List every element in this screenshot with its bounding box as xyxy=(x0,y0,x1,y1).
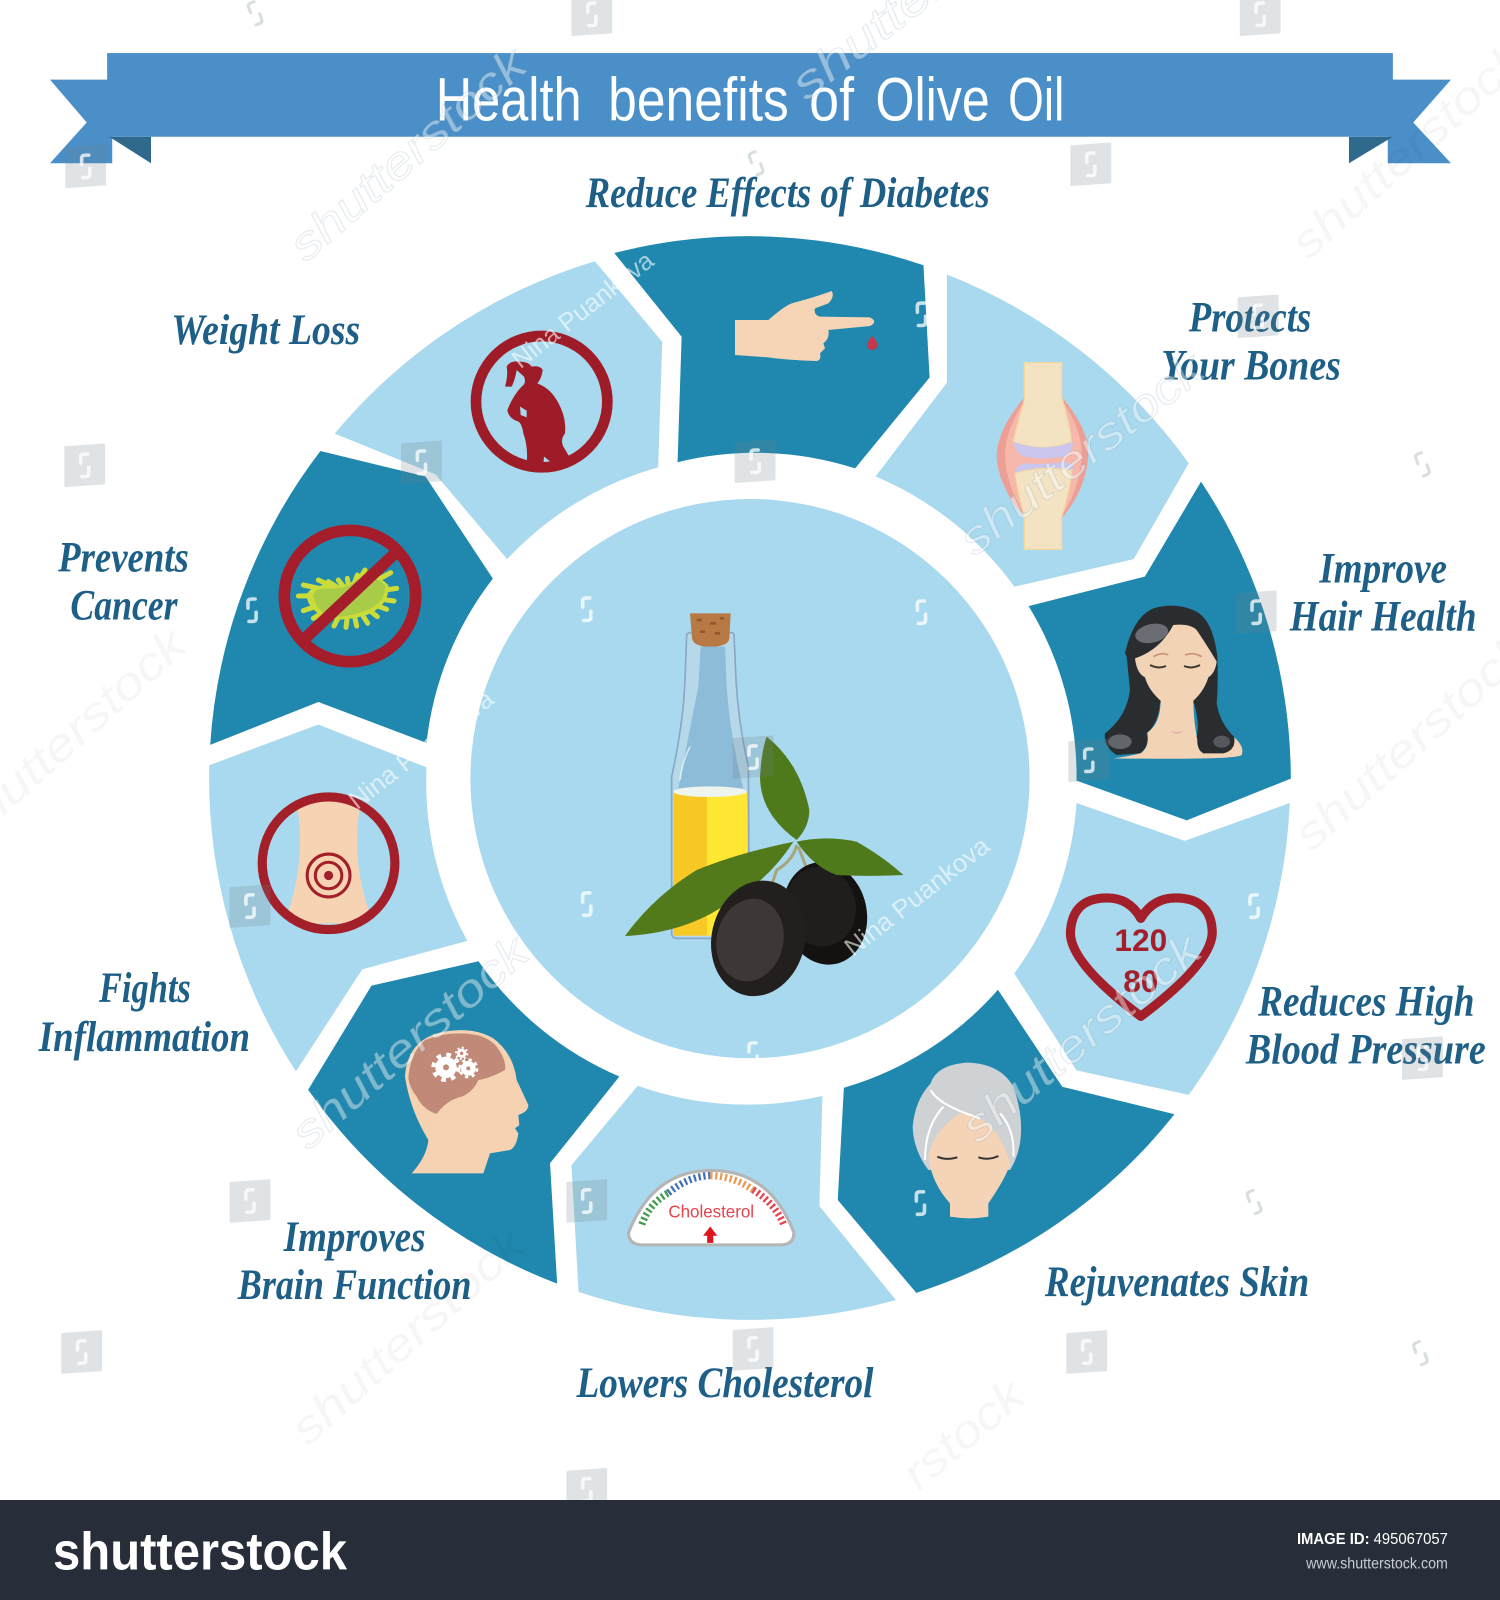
label xyxy=(57,533,189,629)
watermark overlay: shutterstock xyxy=(1280,30,1500,269)
icon: olive oil bottle xyxy=(672,613,749,938)
icon: woman with dark hair xyxy=(1105,606,1242,759)
label: Prevents xyxy=(57,533,189,581)
panel: reduce effects of diabetes xyxy=(585,169,990,468)
watermark overlay: rstock xyxy=(891,1366,1036,1499)
label: Improve xyxy=(1319,545,1447,593)
panel: fights inflammation xyxy=(38,724,467,1071)
icon: olive branch xyxy=(625,737,903,1006)
footer logo: shutterstock xyxy=(53,1522,347,1581)
label: Weight Loss xyxy=(171,306,360,354)
title: benefits xyxy=(608,65,789,133)
website: www.shutterstock.com xyxy=(1305,1555,1448,1572)
panel: improve hair health xyxy=(1029,482,1477,820)
icon: heart with blood pressure xyxy=(1070,898,1212,1016)
title: Health xyxy=(436,65,582,133)
panel: prevents cancer xyxy=(57,451,493,745)
watermark overlay: Nina Puankova xyxy=(840,831,996,962)
watermark overlay: shutterstock xyxy=(279,36,538,271)
label: Reduce Effects of Diabetes xyxy=(585,169,990,217)
icon: heart with blood pressure: 120 xyxy=(1114,922,1167,958)
watermark overlay: shutterstock xyxy=(951,921,1213,1153)
watermark overlay: Nina Puankova xyxy=(507,246,660,374)
icon: crossed weight silhouette xyxy=(476,336,607,467)
watermark overlay: shutterstock xyxy=(280,1216,537,1454)
title banner xyxy=(50,53,1451,163)
panel: protects your bones xyxy=(876,274,1341,587)
label: Rejuvenates Skin xyxy=(1044,1258,1309,1306)
panel: reduces high blood pressure xyxy=(1014,803,1486,1095)
label: Brain Function xyxy=(237,1261,471,1309)
watermark overlay: shutterstock xyxy=(949,340,1216,565)
label: Protects xyxy=(1188,294,1311,342)
label xyxy=(1289,545,1477,641)
image id: IMAGE ID: 495067057 xyxy=(1297,1531,1448,1548)
label xyxy=(1245,977,1486,1073)
watermark overlay: shutterstock xyxy=(281,924,540,1159)
icon: head with brain xyxy=(405,1030,528,1173)
label xyxy=(38,964,250,1061)
label: Improves xyxy=(283,1213,426,1261)
icon: cholesterol gauge xyxy=(629,1170,794,1245)
central circle with olive oil bottle xyxy=(470,499,1030,1058)
watermark overlay: shutterstock xyxy=(1283,622,1500,860)
label: Your Bones xyxy=(1161,342,1341,390)
icon: abdomen with target xyxy=(262,791,395,930)
panel: weight loss xyxy=(171,261,662,559)
icon: finger with blood drop xyxy=(735,291,877,361)
footer bar xyxy=(0,1500,1500,1600)
label: Lowers Cholesterol xyxy=(576,1359,874,1407)
label: Inflammation xyxy=(38,1013,250,1061)
label: Cancer xyxy=(70,581,178,629)
icon: older woman face xyxy=(913,1063,1021,1218)
watermark overlay: Nina Puankova xyxy=(344,684,500,815)
title: Oil xyxy=(1008,65,1064,133)
panel: improves brain function xyxy=(237,961,619,1309)
label: Fights xyxy=(98,964,191,1012)
title xyxy=(436,65,1064,133)
icon: knee joint xyxy=(997,363,1088,549)
icon: cholesterol gauge: Cholesterol xyxy=(668,1201,754,1221)
title: of xyxy=(809,65,855,133)
panel: rejuvenates skin xyxy=(838,990,1309,1306)
label xyxy=(237,1213,471,1309)
icon: heart with blood pressure: 80 xyxy=(1123,963,1158,999)
label xyxy=(1161,294,1341,390)
panel: lowers cholesterol xyxy=(571,1086,896,1407)
icon: crossed out virus xyxy=(284,530,416,662)
title: Olive xyxy=(876,65,990,133)
